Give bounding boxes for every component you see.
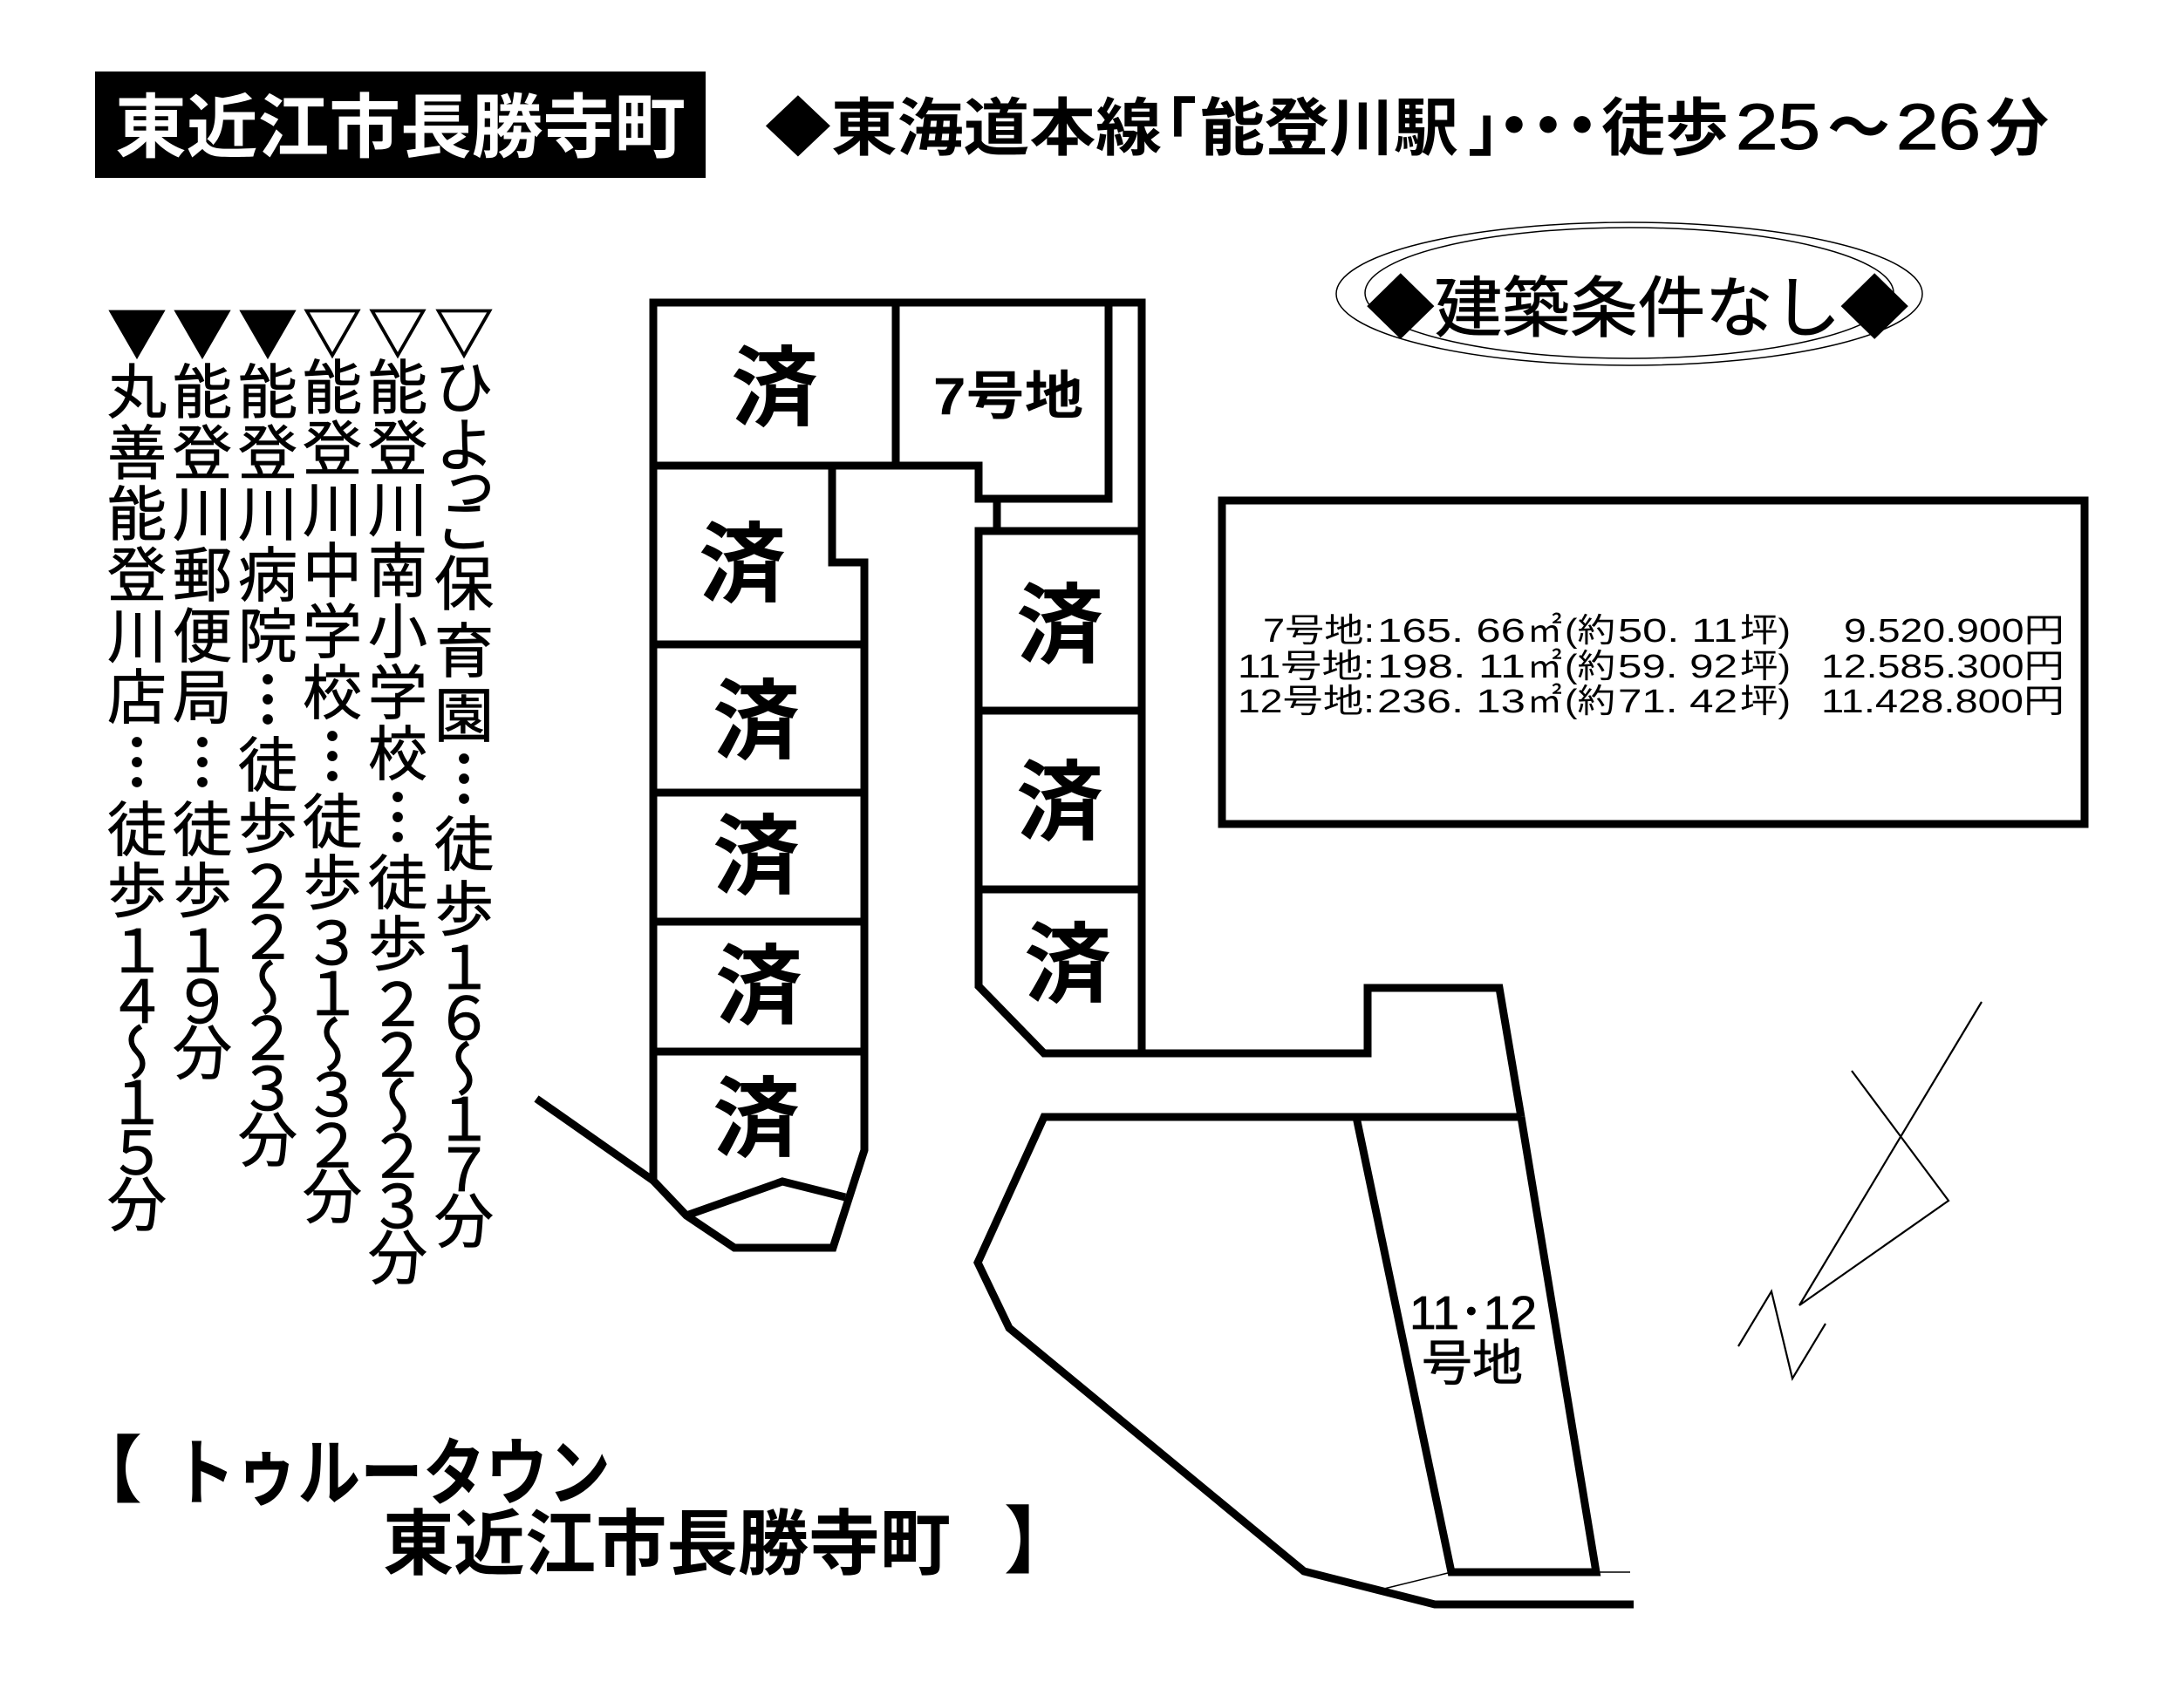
label: lots 11 and 12 xyxy=(1409,1287,1537,1391)
plan: lot 7 outline xyxy=(653,303,1109,531)
row: lot 12: 236. 13 xyxy=(1377,684,1525,720)
text block: development name xyxy=(69,1430,1077,1584)
row: lot 11: (約 xyxy=(1565,649,1615,685)
facility: elementary school: ▽ 能登川南小学 校 … 徒歩 ２２～２３ 分 xyxy=(354,302,441,1288)
heading: nearest station walking time: 「 xyxy=(1134,94,1197,164)
facility: hospital: ▼ 能登川病 院 … 徒歩 ２２～２３ 分 xyxy=(225,303,311,1170)
heading: nearest station walking time: ～ xyxy=(1827,94,1890,164)
row: lot 12 xyxy=(1238,684,2065,720)
lot status: sold marks: 済 xyxy=(1016,732,1103,858)
plan: north block outline xyxy=(649,303,1142,1053)
label: lots 11 and 12: 11･12 xyxy=(1409,1287,1537,1339)
row: lot 7: ㎡ xyxy=(1527,613,1562,650)
label: lot 7: 7号地 xyxy=(933,367,1083,426)
lot status: sold marks: 済 xyxy=(731,317,818,444)
plan: thin boundary lines xyxy=(1384,1572,1630,1589)
heading: nearest station walking time: 25 xyxy=(1736,91,1820,163)
row: lot 11 xyxy=(1238,649,2065,685)
facility: junior high school: ▽ 能登川中学 校 … 徒歩 ３１～３２ 分 xyxy=(290,302,375,1227)
row: lot 12: 71. 42 xyxy=(1618,684,1737,720)
lot status: sold marks: 済 xyxy=(699,494,786,620)
row: lot 11: ㎡ xyxy=(1527,649,1562,685)
row: lot 7: 165. 66 xyxy=(1377,613,1525,650)
text block: development name: 東近江市長勝寺町 xyxy=(383,1505,951,1584)
plan: left column dividers xyxy=(653,644,864,1052)
row: lot 11: 59. 92 xyxy=(1618,649,1737,685)
heading: nearest station walking time xyxy=(765,79,2049,177)
lot status: sold marks xyxy=(699,317,1111,1175)
lot status: sold marks: 済 xyxy=(713,1048,800,1175)
badge: no building conditions xyxy=(1336,222,1922,365)
text block: development name: 】 xyxy=(1004,1501,1077,1583)
row: lot 12: (約 xyxy=(1565,684,1615,720)
lot status: sold marks: 済 xyxy=(1016,555,1103,681)
site plan: lot boundary lines xyxy=(536,298,1634,1604)
title: town name banner: 東近江市長勝寺町 xyxy=(115,89,686,167)
text block: development name: 【 xyxy=(69,1430,142,1512)
heading: nearest station walking time: 徒歩 xyxy=(1601,94,1729,164)
row: lot 11: 11号地: xyxy=(1238,649,1375,685)
heading: nearest station walking time: 分 xyxy=(1986,94,2049,164)
row: lot 7 xyxy=(1263,613,2065,650)
title: town name banner xyxy=(95,72,706,178)
heading: nearest station walking time: 」 xyxy=(1468,94,1531,164)
facility: Maruzen: ▼ 丸善能登川 店 … 徒歩 １４～１５ 分 xyxy=(94,303,180,1235)
icon: north arrow xyxy=(1738,1002,1982,1379)
facility: post office: ▼ 能登川郵便 局 … 徒歩 １９ 分 xyxy=(159,303,246,1083)
heading: nearest station walking time: ◆東海道本線 xyxy=(765,94,1162,164)
plan: right column dividers xyxy=(979,711,1142,889)
plan: left column outline xyxy=(653,298,864,1248)
row: lot 11: 198. 11 xyxy=(1377,649,1525,685)
list: nearby facilities in vertical columns xyxy=(94,302,508,1288)
plan: road edge north xyxy=(1142,988,1521,1117)
text block: development name: トゥルータウン xyxy=(173,1433,611,1515)
row: lot 12: 12号地: xyxy=(1238,684,1375,720)
plan: south block outline xyxy=(978,1117,1634,1604)
row: lot 12: ㎡ xyxy=(1527,684,1562,720)
panel: lot price table xyxy=(1222,501,2085,824)
row: lot 12: 11.428.800円 xyxy=(1821,684,2065,720)
badge: no building conditions: ◆建築条件なし◆ xyxy=(1367,272,1908,346)
lot status: sold marks: 済 xyxy=(713,650,800,777)
plan: lower left corner lines xyxy=(536,1099,845,1216)
row: lot 7: (約 xyxy=(1565,613,1615,650)
facility: nursery: ▽ ひ よ っ こ 保 育園 … 徒 歩 １６～１７ 分 xyxy=(420,302,508,1251)
row: lot 11: 坪) xyxy=(1740,649,1791,685)
row: lot 12: 坪) xyxy=(1740,684,1791,720)
heading: nearest station walking time: 26 xyxy=(1896,91,1981,163)
lot status: sold marks: 済 xyxy=(1024,894,1111,1020)
row: lot 7: 坪) xyxy=(1740,613,1791,650)
row: lot 7: 50. 11 xyxy=(1618,613,1737,650)
lot status: sold marks: 済 xyxy=(715,916,802,1042)
heading: nearest station walking time: ･･･ xyxy=(1492,79,1594,177)
row: lot 7: 7号地: xyxy=(1263,613,1375,650)
row: lot 7: 9.520.900円 xyxy=(1844,613,2065,650)
lot status: sold marks: 済 xyxy=(713,786,800,912)
plan: lots 11 and 12 outline xyxy=(1356,1117,1596,1572)
heading: nearest station walking time: 能登川駅 xyxy=(1200,94,1458,164)
label: lots 11 and 12: 号地 xyxy=(1422,1336,1523,1391)
row: lot 11: 12.585.300円 xyxy=(1821,649,2065,685)
